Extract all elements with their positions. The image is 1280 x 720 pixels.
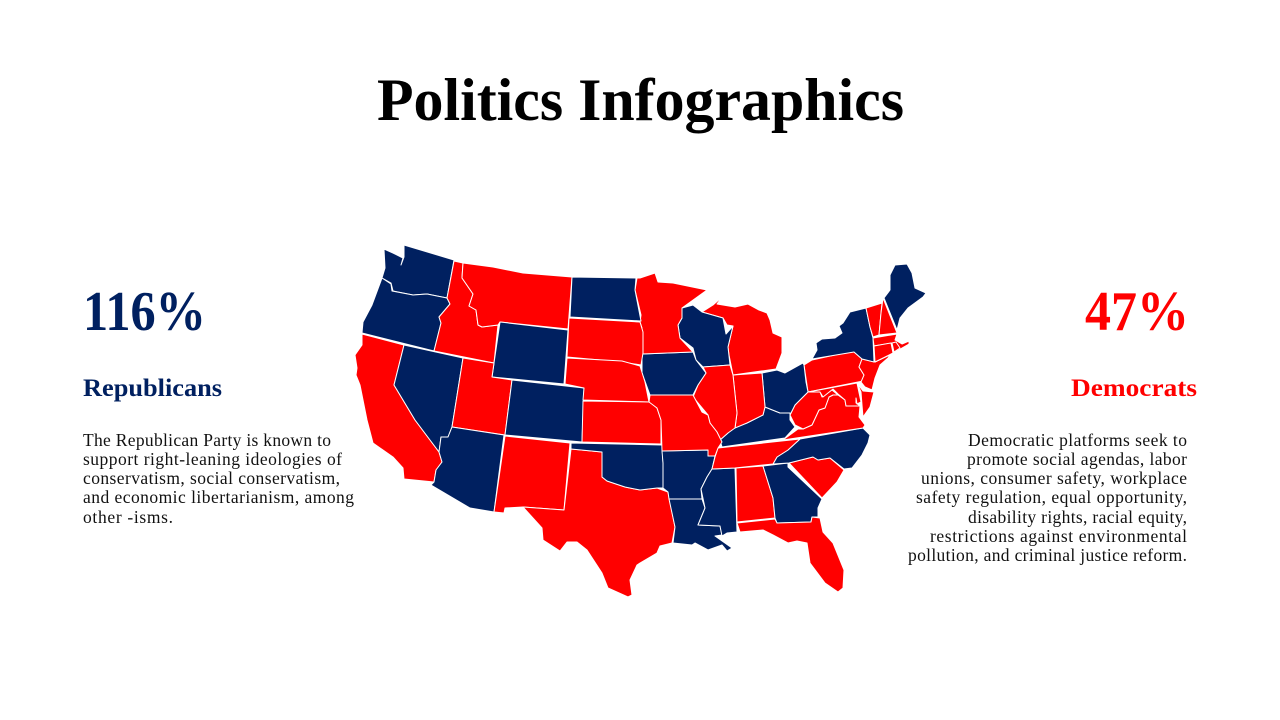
republicans description: and economic libertarianism, among [83,487,354,507]
democrats description: unions, consumer safety, workplace [921,468,1187,488]
republicans heading: Republicans [83,375,222,402]
republicans percentage: 116% [83,281,206,343]
democrats description: pollution, and criminal justice reform. [908,545,1187,565]
democrats description: Democratic platforms seek to [968,430,1187,450]
republicans description [83,430,354,527]
republicans description: The Republican Party is known to [83,430,331,450]
panel: republicans [83,281,354,527]
democrats description: safety regulation, equal opportunity, [916,487,1187,507]
panel: democrats [908,281,1197,565]
democrats description [908,430,1187,565]
title: Politics Infographics [377,67,904,133]
republicans description: other -isms. [83,507,173,527]
republicans description: support right-leaning ideologies of [83,449,342,469]
democrats heading: Democrats [1071,375,1197,402]
republicans description: conservatism, social conservatism, [83,468,340,488]
democrats percentage: 47% [1085,281,1189,343]
democrats description: restrictions against environmental [930,526,1187,546]
map: United States by party [355,245,926,597]
democrats description: disability rights, racial equity, [968,507,1187,527]
democrats description: promote social agendas, labor [967,449,1187,469]
